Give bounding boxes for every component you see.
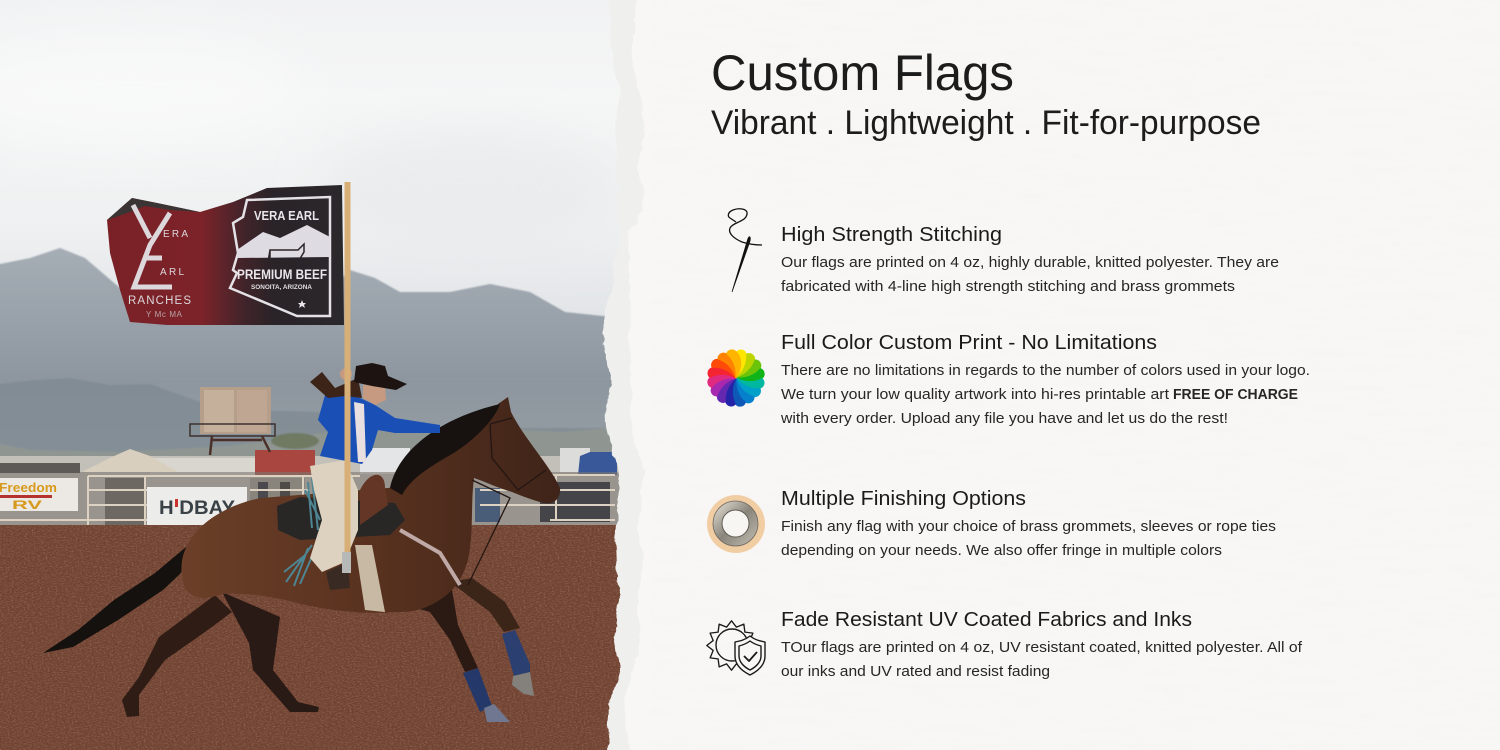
body, neck and head — [182, 397, 560, 613]
heading: High Strength Stitching — [781, 223, 1002, 246]
far hind leg — [222, 592, 319, 712]
flag logo: Arizona premium beef: PREMIUM BEEF — [237, 267, 327, 282]
flag logo: Vera Earl Ranches: ERA — [163, 229, 188, 240]
sash — [354, 402, 366, 462]
horse — [43, 397, 560, 722]
icon: color wheel — [706, 348, 766, 408]
banner: Hudbay — [147, 487, 247, 526]
description: We turn your low quality artwork into hi-res printable art — [781, 387, 1169, 403]
description: Our flags are printed on 4 oz, highly durable, knitted polyester. They are — [781, 255, 1279, 271]
hair — [310, 372, 362, 398]
rider — [284, 363, 440, 590]
flag logo: Vera Earl Ranches: RANCHES — [128, 295, 191, 307]
fringe — [284, 478, 320, 586]
photo: rodeo rider carrying a custom flag — [0, 0, 660, 750]
breast collar — [400, 530, 460, 585]
heading: Full Color Custom Print - No Limitations — [781, 331, 1157, 354]
feature: stitching — [728, 209, 1279, 295]
description — [780, 363, 1310, 427]
hand — [340, 368, 352, 380]
feature: full color print — [706, 331, 1310, 427]
description: fabricated with 4-line high strength stitching and brass grommets — [781, 279, 1235, 295]
saddle blanket — [277, 497, 405, 540]
feature: fade resistant — [707, 608, 1303, 680]
feature: finishing options — [707, 487, 1276, 559]
arena ground — [0, 525, 640, 750]
description: TOur flags are printed on 4 oz, UV resistant coated, knitted polyester. All of — [781, 640, 1303, 656]
paper background — [625, 0, 1500, 750]
cinch strap — [355, 545, 385, 612]
title: Custom Flags — [711, 45, 1014, 101]
raised foreleg — [450, 578, 520, 632]
banner: Freedom RV — [0, 478, 78, 512]
description: depending on your needs. We also offer fringe in multiple colors — [781, 543, 1222, 559]
flag logo: Vera Earl Ranches: Y Mc MA — [146, 310, 183, 319]
description: There are no limitations in regards to the number of colors used in your logo. — [781, 363, 1310, 379]
icon: needle and thread — [728, 209, 762, 292]
subtitle: Vibrant . Lightweight . Fit-for-purpose — [711, 104, 1261, 142]
icon: sun and shield — [707, 621, 765, 675]
description — [781, 519, 1276, 559]
face — [363, 385, 386, 405]
blue shirt — [318, 392, 440, 464]
flag pole — [342, 182, 351, 573]
banner: Hudbay: H DBAY — [159, 498, 235, 519]
torn paper edge — [602, 0, 1500, 750]
chaps — [310, 460, 358, 572]
description: Finish any flag with your choice of brass grommets, sleeves or rope ties — [781, 519, 1276, 535]
mountains — [0, 248, 660, 480]
sky — [0, 0, 640, 330]
heading: Fade Resistant UV Coated Fabrics and Inks — [781, 608, 1192, 631]
icon: brass grommet — [707, 495, 765, 553]
near foreleg — [405, 590, 478, 672]
flag — [107, 185, 344, 325]
boot and stirrup — [326, 562, 350, 590]
water tower — [190, 387, 275, 455]
hat — [354, 363, 407, 390]
mane — [390, 404, 500, 495]
flag logo: Arizona premium beef: SONOITA, ARIZONA — [251, 285, 313, 291]
description: our inks and UV rated and resist fading — [781, 664, 1050, 680]
description: with every order. Upload any file you have and let us do the rest! — [780, 411, 1228, 427]
saddle — [360, 475, 388, 525]
tail — [43, 547, 186, 653]
description: FREE OF CHARGE — [1173, 387, 1298, 403]
flag logo: Vera Earl Ranches: ARL — [160, 267, 184, 278]
bridle — [468, 418, 546, 585]
banner: Freedom RV: RV — [12, 498, 42, 512]
background arena: tent, tower, trailers, crowd — [0, 387, 640, 526]
flag logo: Arizona premium beef — [230, 197, 330, 316]
near hind leg — [122, 595, 232, 717]
flag logo: Arizona premium beef: VERA EARL — [254, 209, 319, 223]
heading: Multiple Finishing Options — [781, 487, 1026, 510]
flag logo: Vera Earl Ranches — [128, 205, 191, 319]
description — [781, 255, 1279, 295]
description — [781, 640, 1303, 680]
banner: Freedom RV: Freedom — [0, 480, 57, 495]
